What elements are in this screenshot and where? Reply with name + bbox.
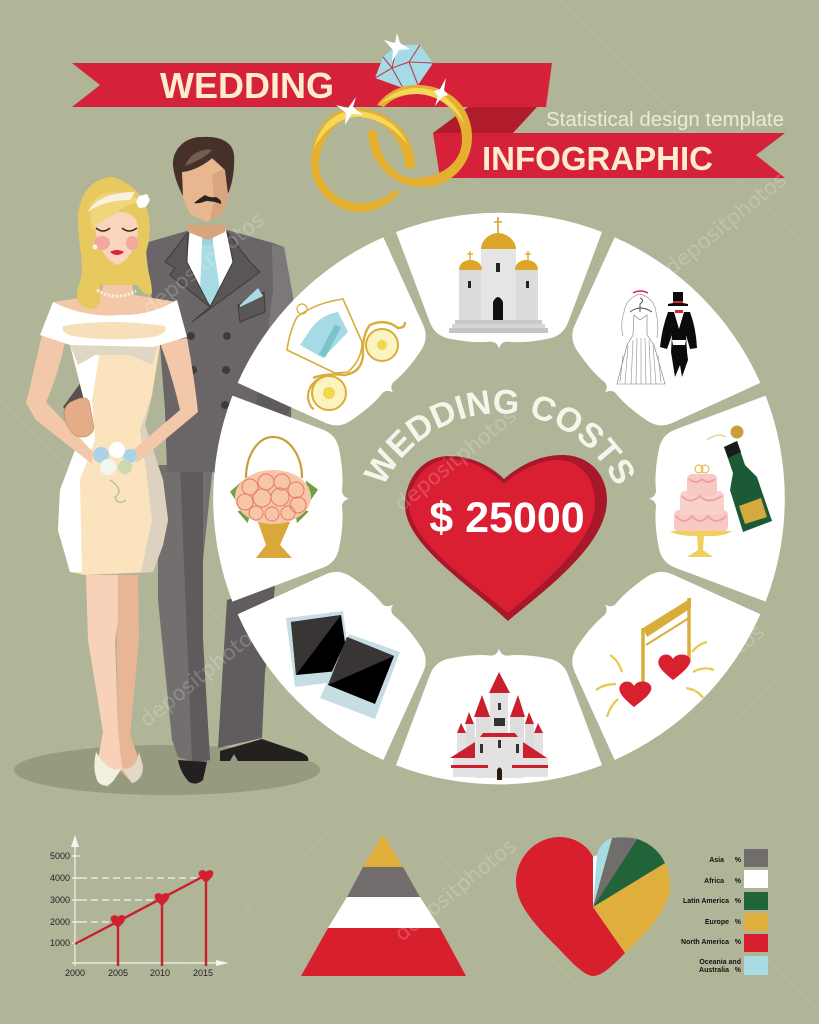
segment: cake and champagne	[649, 396, 785, 602]
pie legend: North America	[681, 939, 729, 946]
axis labels: 3000	[50, 895, 70, 905]
axis labels: 4000	[50, 873, 70, 883]
segment: castle	[396, 649, 602, 784]
segment: photos	[224, 532, 466, 774]
title ribbon top	[72, 63, 552, 107]
groom shirt and tie	[187, 226, 233, 305]
bride arms	[26, 335, 198, 464]
circular heading: WEDDING COSTS	[363, 390, 634, 484]
pie legend: Asia	[709, 857, 724, 864]
center heart	[405, 455, 607, 621]
pie legend: Oceania and	[699, 959, 741, 966]
pie legend: %	[735, 898, 742, 905]
line chart: 2015	[193, 968, 213, 978]
watermark: depositphotos	[660, 167, 791, 280]
icon: instant photos	[286, 611, 400, 719]
axis labels	[50, 851, 70, 948]
segment: church	[396, 213, 602, 349]
line chart: 2010	[150, 968, 170, 978]
groom figure	[63, 137, 308, 784]
shadow under couple	[14, 745, 320, 795]
pie legend: Latin America	[683, 898, 729, 905]
title ribbon bottom	[433, 133, 785, 178]
segment: flower basket	[213, 396, 349, 602]
axis labels: 2000	[50, 917, 70, 927]
title text infographic: INFOGRAPHIC	[482, 140, 713, 177]
pocket square	[240, 288, 263, 307]
pie legend: %	[735, 919, 742, 926]
pie legend	[681, 849, 768, 975]
segment: carriage	[224, 224, 466, 465]
axis labels: 5000	[50, 851, 70, 861]
axes	[72, 840, 218, 966]
segment: bridal outfits	[532, 224, 774, 465]
groom's hand	[64, 398, 94, 437]
groom trousers	[158, 465, 275, 764]
bride hair back	[77, 177, 152, 309]
icon: carriage	[287, 299, 405, 410]
groom shoes	[178, 739, 308, 784]
ring sparkle	[336, 97, 363, 125]
pyramid chart	[301, 834, 466, 976]
hair front and band	[87, 192, 150, 230]
icon: castle	[450, 672, 548, 780]
icon: wedding dress and tuxedo	[617, 291, 697, 384]
pie legend: Australia	[699, 967, 729, 974]
heart pie chart	[516, 837, 670, 976]
bride shoes	[94, 752, 143, 786]
watermark	[135, 167, 791, 946]
jacket buttons	[187, 332, 231, 409]
ring left	[311, 108, 415, 212]
title text wedding: WEDDING	[160, 65, 334, 106]
groom head	[173, 137, 234, 240]
groom sleeve	[63, 378, 92, 412]
bride figure	[26, 177, 198, 787]
line chart: 2000	[65, 968, 85, 978]
heart markers	[111, 915, 125, 928]
watermark: depositphotos	[135, 619, 266, 732]
pie legend: %	[735, 878, 742, 885]
watermark: depositphotos	[638, 619, 769, 732]
groom lapels	[165, 232, 265, 322]
groom jacket	[145, 230, 293, 500]
wedding rings	[311, 33, 472, 212]
line chart	[50, 835, 229, 978]
bride chest	[53, 270, 177, 318]
icon: church	[449, 217, 548, 333]
pearl necklace	[97, 290, 136, 296]
icon: flower basket	[232, 437, 316, 558]
total cost: $ 25000	[429, 494, 585, 542]
pie legend: %	[735, 857, 742, 864]
watermark: depositphotos	[138, 207, 269, 320]
watermark: depositphotos	[390, 403, 521, 516]
bride face	[92, 212, 138, 265]
title ribbon fold	[433, 107, 537, 133]
bride collar	[40, 300, 187, 347]
trend line and stems	[75, 875, 206, 966]
pie legend: Africa	[704, 878, 724, 885]
icon: music note with hearts	[596, 598, 714, 717]
bouquet	[93, 442, 137, 502]
ring sparkle two	[434, 78, 448, 106]
bride legs	[86, 575, 142, 787]
watermark: depositphotos	[390, 833, 521, 946]
pie legend: %	[735, 939, 742, 946]
ring right	[368, 85, 472, 187]
moustache	[194, 195, 221, 204]
wheel of wedding costs	[213, 212, 785, 784]
wedding dress	[58, 345, 168, 575]
pie legend: Europe	[705, 919, 729, 926]
line chart: 2005	[108, 968, 128, 978]
segment: music	[532, 532, 774, 774]
subtitle: Statistical design template	[546, 109, 784, 131]
icon: cake and champagne	[670, 426, 772, 557]
axis labels: 1000	[50, 938, 70, 948]
diamond	[375, 33, 433, 88]
pie legend: %	[735, 967, 742, 974]
